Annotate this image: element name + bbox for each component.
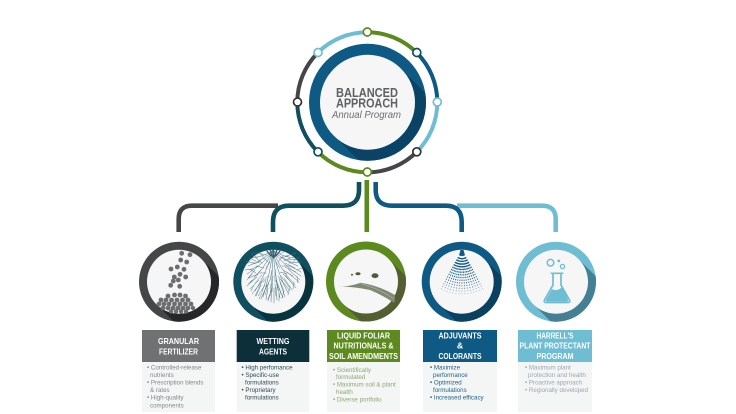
- panel list: • Optimized: [430, 380, 462, 386]
- panel list: • High perfomance: [242, 364, 293, 372]
- inner ring with shadow: [309, 44, 426, 161]
- panel list: nutrients: [150, 372, 174, 379]
- panel list: performance: [433, 372, 468, 379]
- outer segmented ring: [297, 32, 437, 172]
- panel heading: ADJUVANTS: [438, 330, 482, 340]
- panel list: health: [336, 389, 353, 396]
- panel heading: AGENTS: [259, 346, 287, 356]
- panel list: protection and health: [528, 372, 586, 379]
- icon: leaf with droplets: [336, 272, 395, 303]
- panel: harrell's plant protectant program: [518, 330, 592, 412]
- badge title: APPROACH: [336, 96, 398, 110]
- panel list: [430, 364, 485, 402]
- icon: spray cone: [440, 250, 484, 294]
- panel list: [525, 364, 589, 394]
- panel heading: &: [457, 340, 463, 350]
- panel heading: FERTILIZER: [159, 346, 199, 356]
- panel heading: PLANT PROTECTANT: [520, 340, 591, 350]
- badge title: [331, 86, 401, 121]
- icon: flask: [544, 259, 570, 302]
- panel heading: PROGRAM: [536, 351, 574, 361]
- connector: harrell's plant protectant: [457, 206, 556, 232]
- icon circle: granular fertilizer: [139, 242, 219, 322]
- panel heading: HARRELL'S: [536, 330, 574, 340]
- icon: falling granules: [157, 251, 195, 314]
- panel heading: [518, 330, 592, 362]
- connector: adjuvants: [376, 182, 462, 232]
- panel heading: [327, 330, 400, 362]
- panel list: • Diverse portfolio: [333, 396, 382, 404]
- panel: granular fertilizer: [142, 330, 215, 412]
- panel list: • High-quality: [147, 395, 184, 402]
- panel list: • Maximum plant: [525, 364, 571, 372]
- panel list: [333, 367, 396, 404]
- panel heading: NUTRITIONALS &: [334, 340, 394, 350]
- panel list: • Scientifically: [333, 367, 372, 374]
- panel list: • Maximize: [430, 364, 461, 372]
- central badge: [292, 27, 442, 177]
- connector: wetting agents: [273, 182, 359, 232]
- panel: adjuvants and colorants: [423, 330, 497, 412]
- panel list: • Maximum soil & plant: [333, 382, 396, 388]
- ring nodes: [294, 28, 441, 176]
- panel heading: GRANULAR: [158, 336, 200, 346]
- panel list: • Proprietary: [242, 387, 277, 394]
- panel heading: WETTING: [256, 336, 290, 346]
- panel list: • Proactive approach: [525, 380, 583, 386]
- panel list: formulations: [245, 395, 279, 402]
- panel list: • Prescription blends: [147, 380, 204, 386]
- panel list: • Controlled-release: [147, 364, 202, 372]
- panel list: [242, 364, 293, 402]
- connector: granular fertilizer: [179, 206, 278, 232]
- panel heading: [237, 330, 309, 362]
- badge title: Annual Program: [331, 109, 401, 121]
- panel list: • Regionally developed: [525, 387, 589, 394]
- panel list: • Increased efficacy: [430, 395, 485, 402]
- connector: liquid foliar: [364, 180, 369, 232]
- panel list: formulated: [336, 374, 366, 381]
- panel heading: LIQUID FOLIAR: [337, 330, 391, 340]
- badge title: BALANCED: [336, 86, 398, 100]
- panel: wetting agents: [237, 330, 309, 412]
- icon circle: liquid foliar: [326, 242, 406, 322]
- panel list: formulations: [433, 387, 467, 394]
- panel: liquid foliar: [327, 330, 400, 412]
- panel list: components: [150, 402, 184, 409]
- panel heading: [142, 330, 215, 362]
- icon circle: plant protectant: [516, 242, 596, 322]
- icon circle: adjuvants: [422, 242, 502, 322]
- icon circle: wetting agents: [233, 242, 314, 322]
- panel list: [147, 364, 204, 409]
- panel heading: COLORANTS: [438, 351, 482, 361]
- panel heading: [423, 330, 497, 362]
- panel list: & rates: [150, 387, 170, 394]
- icon: root system: [245, 250, 302, 303]
- panel heading: SOIL AMENDMENTS: [329, 351, 398, 361]
- panel list: • Specific-use: [242, 372, 280, 379]
- panel list: formulations: [245, 380, 279, 386]
